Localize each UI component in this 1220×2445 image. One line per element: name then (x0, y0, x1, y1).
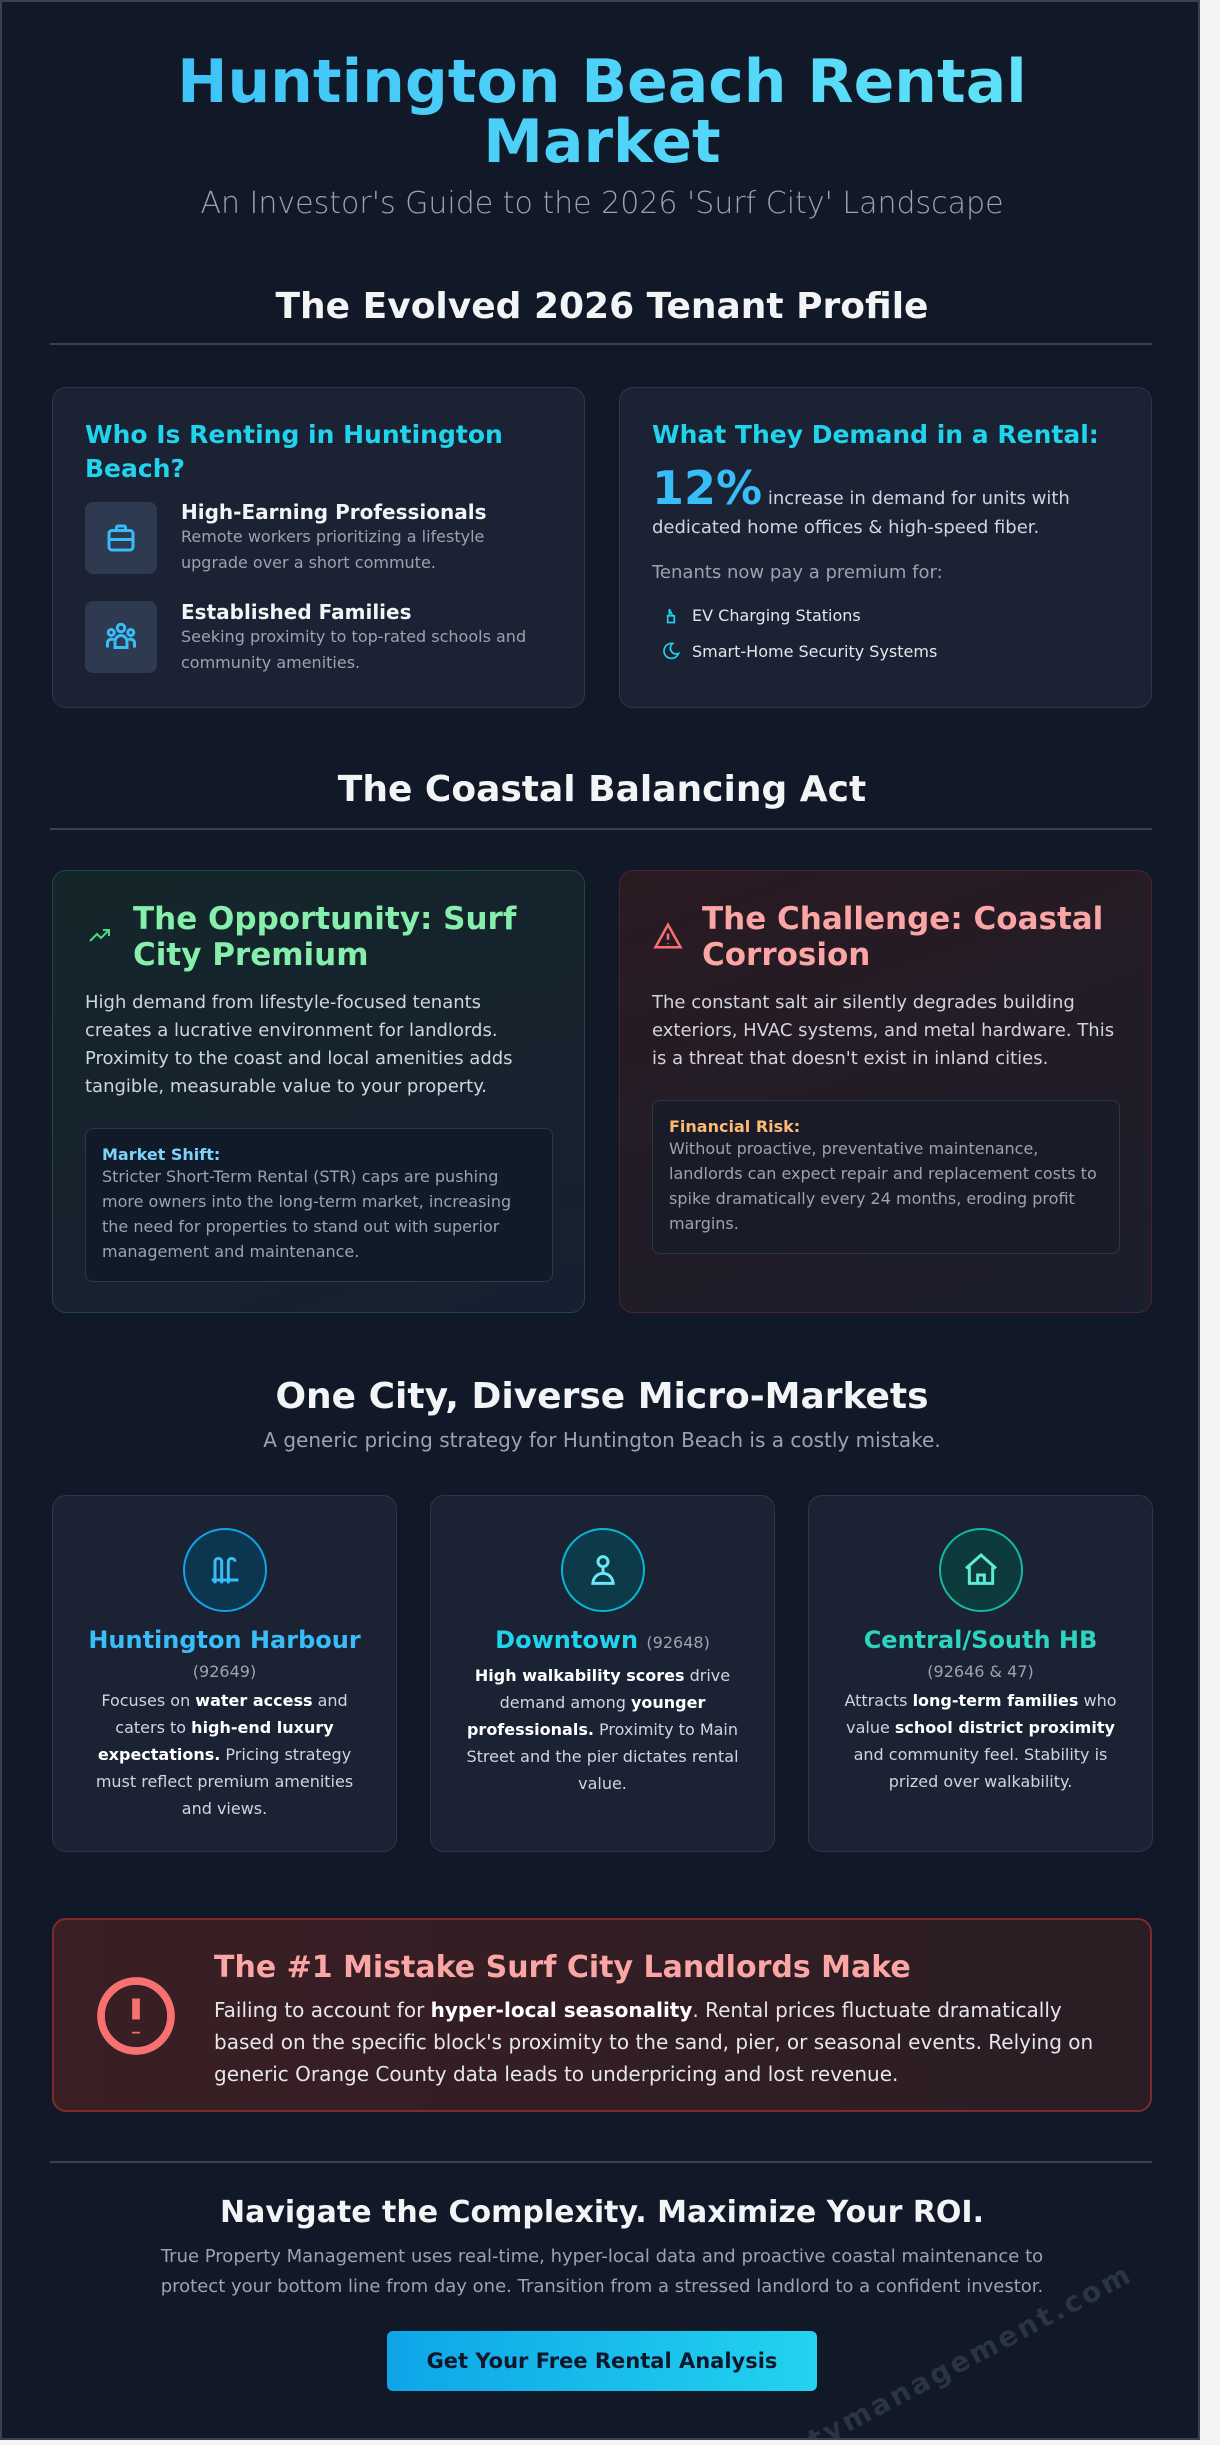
name: Downtown (92648) (495, 1626, 710, 1654)
panel: who is renting (52, 387, 585, 708)
item: families: Seeking proximity to top-rated schools and community amenities. (181, 627, 526, 672)
title: Huntington Beach Rental (177, 47, 1027, 117)
button: CTA: Get Your Free Rental Analysis (427, 2349, 777, 2373)
text: premium: Tenants now pay a premium for: (652, 562, 943, 583)
body: Failing to account for hyper-local seasonality. Rental prices fluctuate dramatically based on the specific block's proximity to the sand, pier, or seasonal events. Relying on generic Orange County data leads to underpricing and lost revenue. (214, 1998, 1093, 2086)
stat: 12%: 12% increase in demand for units with dedicated home offices & high-speed fiber. (652, 461, 1070, 538)
item: professionals (181, 500, 487, 572)
icon: house (938, 1528, 1022, 1612)
icon: harbour (182, 1528, 266, 1612)
callout: financial risk: Without proactive, preventative maintenance, landlords can expect repair and replacement costs to spike dramatically every 24 months, eroding profit margins. (669, 1139, 1097, 1233)
title (177, 47, 1027, 177)
icon: person (560, 1528, 644, 1612)
item: professionals: High-Earning Professionals (181, 500, 487, 524)
heading: CTA: Navigate the Complexity. Maximize Your ROI. (220, 2195, 984, 2230)
panel: central/south: (92646 & 47) (927, 1662, 1034, 1681)
CTA text: True Property Management uses real-time, hyper-local data and proactive coastal maintenance to protect your bottom line from day one. Transition from a stressed landlord to a confident investor. (161, 2246, 1043, 2297)
item: families (181, 600, 526, 672)
item: families: Established Families (181, 600, 412, 624)
item: professionals: Remote workers prioritizing a lifestyle upgrade over a short commute. (181, 527, 484, 572)
panel: challenge (619, 870, 1152, 1313)
list: premium items (663, 606, 937, 661)
icon: warning (654, 922, 682, 948)
list: premium items: EV Charging Stations (692, 606, 861, 625)
panel: downtown (430, 1495, 775, 1852)
callout: financial risk (652, 1100, 1120, 1254)
icon: briefcase (85, 502, 157, 574)
heading: The Opportunity: Surf City Premium (133, 901, 516, 973)
icon: trend (89, 929, 110, 942)
text: Attracts long-term families who value school district proximity and community feel. Stability is prized over walkability. (844, 1691, 1117, 1791)
callout: #1 mistake (52, 1918, 1152, 2112)
heading: micro-markets: One City, Diverse Micro-Markets (275, 1376, 929, 1417)
icon: alert (97, 1977, 175, 2055)
panel: harbour: (92649) (193, 1662, 256, 1681)
title: Market (483, 107, 721, 177)
body: High demand from lifestyle-focused tenants creates a lucrative environment for landlords. Proximity to the coast and local amenities adds tangible, measurable value to your property. (85, 992, 513, 1097)
panel: central/south (808, 1495, 1153, 1852)
panel: opportunity (52, 870, 585, 1313)
list: premium items: Smart-Home Security Systems (692, 642, 937, 661)
subtitle: An Investor's Guide to the 2026 'Surf City' Landscape (200, 186, 1004, 221)
callout: financial risk: Financial Risk: (669, 1117, 800, 1136)
callout: market shift (85, 1128, 553, 1282)
callout: market shift: Market Shift: (102, 1145, 220, 1164)
button: CTA (387, 2331, 817, 2391)
heading: tenant profile: The Evolved 2026 Tenant Profile (276, 286, 928, 327)
text: Focuses on water access and caters to high-end luxury expectations. Pricing strategy must reflect premium amenities and views. (96, 1691, 353, 1818)
body: The constant salt air silently degrades building exteriors, HVAC systems, and metal hardware. This is a threat that doesn't exist in inland cities. (652, 992, 1114, 1069)
callout: market shift: Stricter Short-Term Rental (STR) caps are pushing more owners into the long-term market, increasing the need for properties to stand out with superior management and maintenance. (102, 1167, 511, 1261)
heading: The Challenge: Coastal Corrosion (702, 901, 1103, 973)
panel heading: Who Is Renting in Huntington Beach? (85, 420, 503, 483)
panel heading: What They Demand in a Rental: (652, 420, 1099, 449)
panel: demands (619, 387, 1152, 708)
heading: The #1 Mistake Surf City Landlords Make (214, 1950, 911, 1985)
subheading: A generic pricing strategy for Huntington Beach is a costly mistake. (263, 1428, 941, 1452)
heading: balancing act: The Coastal Balancing Act (338, 769, 866, 810)
name: Huntington Harbour (88, 1626, 361, 1654)
text: High walkability scores drive demand among younger professionals. Proximity to Main Street and the pier dictates rental value. (466, 1666, 739, 1793)
name: Central/South HB (864, 1626, 1097, 1654)
panel: harbour (52, 1495, 397, 1852)
icon: family (85, 601, 157, 673)
